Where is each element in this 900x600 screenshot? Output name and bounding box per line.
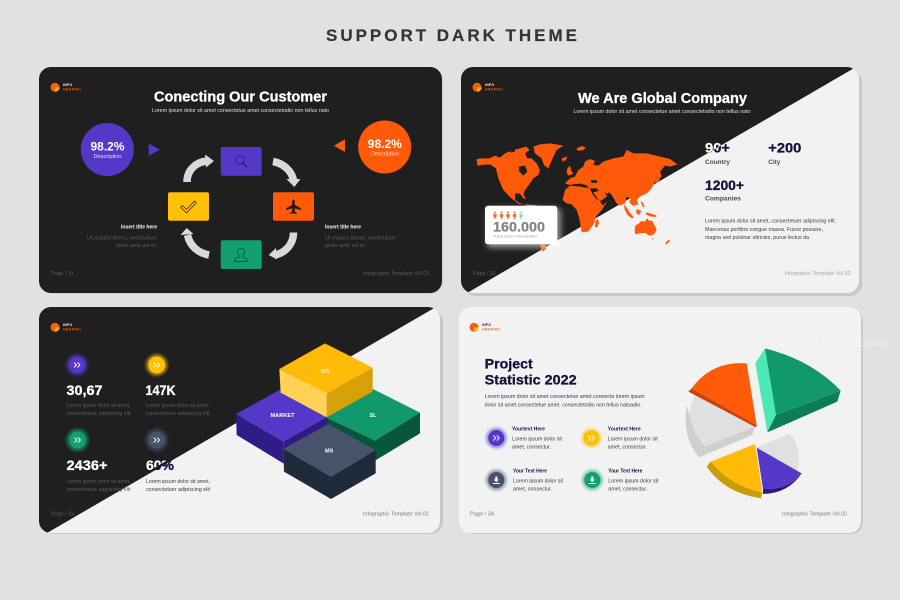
legend item: slate: Your Text Here bbox=[513, 468, 547, 474]
stat circle: purple: Description bbox=[94, 154, 122, 160]
logo: GRAPHIC bbox=[63, 328, 82, 332]
footer label: Infographic Template Vol.02 bbox=[785, 271, 851, 277]
watermark: www.25xl.com bbox=[779, 334, 888, 350]
isometric block chart bbox=[236, 343, 420, 499]
stat: companies bbox=[705, 177, 744, 202]
tile: check bbox=[168, 192, 209, 221]
stat: cities bbox=[768, 140, 802, 166]
paragraph bbox=[705, 218, 836, 241]
heading: Statistic 2022 bbox=[485, 372, 577, 388]
block labels: MS bbox=[325, 448, 334, 454]
logo: GRAPHIC bbox=[63, 88, 82, 92]
stat: 147K: consectetuer adipiscing elit bbox=[146, 411, 210, 417]
exploded 3D pie chart bbox=[686, 348, 841, 498]
stat: 2436+ bbox=[66, 428, 131, 493]
stat: 30,67: Lorem ipsum dolor sit amet, bbox=[66, 403, 130, 409]
pointer: purple triangle bbox=[149, 143, 160, 156]
stat: cities: +200 bbox=[768, 140, 802, 156]
stat: 60%: Lorem ipsum dolor sit amet, bbox=[146, 479, 210, 485]
heading bbox=[485, 356, 577, 388]
stat: 30,67 bbox=[66, 354, 131, 417]
legend item: green bbox=[582, 468, 659, 492]
stat: countries: Country bbox=[705, 160, 731, 166]
block: slate MS bbox=[283, 424, 376, 499]
block labels: SL bbox=[370, 413, 377, 419]
pointer: orange triangle bbox=[334, 139, 345, 152]
heading: Conecting Our Customer bbox=[154, 90, 327, 106]
footer label: Infographic Template Vol.02 bbox=[363, 512, 429, 518]
logo: INFO bbox=[485, 83, 494, 87]
page number: Page / 33 bbox=[51, 512, 74, 518]
legend item: green: Your Text Here bbox=[608, 468, 643, 474]
logo bbox=[50, 323, 82, 332]
stat: 147K: Lorem ipsum dolor sit amet, bbox=[146, 403, 210, 409]
page number: Page / 34 bbox=[470, 512, 494, 518]
stat: 60%: consectetuer adipiscing elit bbox=[146, 487, 211, 493]
block labels: MARKET bbox=[270, 413, 295, 419]
panel: project statistic bbox=[459, 307, 863, 534]
text block: right: Ut mauris libero, vestibulum bbox=[325, 236, 395, 242]
tile: plane bbox=[273, 192, 314, 221]
stat circle: orange: Description bbox=[371, 152, 399, 158]
slice: purple bbox=[757, 448, 802, 494]
stat circle: purple bbox=[81, 123, 134, 176]
text block: right: Insert title here bbox=[325, 224, 361, 230]
stat: 2436+: 2436+ bbox=[66, 457, 108, 473]
tile: user bbox=[221, 240, 262, 269]
world map bbox=[477, 143, 677, 252]
slice: grey left bbox=[686, 395, 755, 457]
text block: left: Insert title here bbox=[121, 224, 157, 230]
arrow: purple to orange bbox=[273, 162, 300, 187]
card: total users bbox=[485, 206, 561, 248]
stat circle: orange bbox=[358, 120, 411, 174]
block: purple MARKET bbox=[236, 389, 327, 463]
paragraph: Maecenas porttitor congue massa. Fusce posuere, bbox=[705, 227, 823, 233]
legend item: purple bbox=[486, 426, 563, 450]
block: green SL bbox=[326, 388, 420, 461]
stat circle: purple: 98.2% bbox=[90, 140, 125, 154]
heading: We Are Global Company bbox=[578, 91, 747, 107]
stat: 2436+: Lorem ipsum dolor sit amet, bbox=[66, 479, 130, 485]
block labels: MS bbox=[321, 369, 330, 375]
stat: 60%: 60% bbox=[146, 457, 175, 473]
paragraph: magna sed pulvinar ultricies, purus lectus da bbox=[705, 235, 809, 241]
stat: 2436+: consectetuer adipiscing elit bbox=[66, 487, 131, 493]
card: total users: Total User Interaction bbox=[493, 233, 537, 238]
heading: Project bbox=[485, 356, 533, 372]
people icons bbox=[493, 212, 523, 219]
stat: companies: Companies bbox=[705, 196, 742, 202]
legend item: yellow: amet, consectur. bbox=[608, 444, 647, 450]
block labels bbox=[270, 369, 377, 454]
stat: 60% bbox=[145, 428, 211, 493]
arrow: orange to green bbox=[269, 232, 294, 260]
slice: orange bbox=[688, 363, 757, 427]
stat: cities: City bbox=[768, 160, 781, 166]
logo: INFO bbox=[482, 323, 491, 327]
legend item: green: amet, consectur. bbox=[608, 486, 647, 492]
stat: 30,67: 30,67 bbox=[66, 382, 103, 398]
logo bbox=[472, 83, 504, 92]
legend item: yellow: Lorem ipsum dolor sit bbox=[608, 436, 658, 442]
panel: connecting our customer bbox=[39, 67, 443, 294]
legend item: green: Lorem ipsum dolor sit bbox=[608, 478, 659, 484]
stat: countries bbox=[705, 140, 731, 166]
legend item: slate: Lorem ipsum dolor sit bbox=[513, 478, 564, 484]
paragraph: Lorem ipsum dolor sit amet consectetue amet connecte lorem ipsum bbox=[485, 394, 645, 400]
slice: grey back bbox=[757, 433, 799, 472]
legend item: purple: Lorem ipsum dolor sit bbox=[512, 436, 563, 442]
logo bbox=[470, 323, 501, 332]
stat: 147K bbox=[146, 354, 210, 417]
logo: GRAPHIC bbox=[485, 88, 504, 92]
stat circle: orange: 98.2% bbox=[368, 137, 402, 151]
tile: search bbox=[221, 147, 262, 176]
stat: 147K: 147K bbox=[146, 382, 176, 398]
legend item: purple: amet, consectur. bbox=[512, 444, 551, 450]
legend item: yellow: Yourtext Here bbox=[608, 426, 641, 432]
subheading: Lorem ipsum dolor sit amet consectetue amet consectetodio non tellus nato bbox=[152, 108, 329, 114]
slice: green bbox=[755, 348, 841, 432]
stat: 30,67: consectetuer adipiscing elit bbox=[66, 411, 131, 417]
legend item: slate bbox=[486, 468, 564, 492]
footer label: Infographic Template Vol.02 bbox=[363, 271, 429, 277]
page number: Page / 31 bbox=[51, 271, 74, 277]
text block: right: pede ante ad et. bbox=[325, 243, 366, 249]
logo: GRAPHIC bbox=[482, 328, 501, 332]
panel: statistics blocks bbox=[39, 307, 443, 534]
arrow: yellow to purple bbox=[187, 154, 214, 182]
text block: left bbox=[87, 224, 157, 249]
footer label: Infographic Template Vol.02 bbox=[782, 512, 847, 518]
logo bbox=[50, 83, 82, 92]
text block: left: pede ante ad et. bbox=[116, 243, 157, 249]
logo: INFO bbox=[63, 323, 72, 327]
subheading: Lorem ipsum dolor sit amet consectetue amet consectetodio non tellus nato bbox=[574, 109, 751, 115]
slice: yellow bbox=[707, 444, 762, 498]
arrow: green to yellow bbox=[180, 228, 209, 255]
paragraph: dolor sit amet consectetue amet. consectetodio non tellus natoadio. bbox=[485, 402, 642, 408]
text block: right bbox=[325, 224, 395, 249]
title: SUPPORT DARK THEME bbox=[326, 26, 577, 45]
panel: global company bbox=[461, 67, 862, 296]
legend item: yellow bbox=[581, 426, 658, 450]
page number: Page / 32 bbox=[473, 271, 496, 277]
legend item: purple: Yourtext Here bbox=[512, 426, 545, 432]
stat: countries: 90+ bbox=[705, 140, 730, 156]
block: yellow MS bbox=[279, 343, 373, 417]
text block: left: Ut mauris libero, vestibulum bbox=[87, 236, 157, 242]
legend item: slate: amet, consectur. bbox=[513, 486, 552, 492]
paragraph: Lorem ipsum dolor sit amet, consectetuer adipiscing elit. bbox=[705, 218, 836, 224]
logo: INFO bbox=[63, 83, 72, 87]
paragraph bbox=[485, 394, 645, 408]
card: total users: 160.000 bbox=[493, 219, 545, 235]
stat: companies: 1200+ bbox=[705, 177, 744, 193]
